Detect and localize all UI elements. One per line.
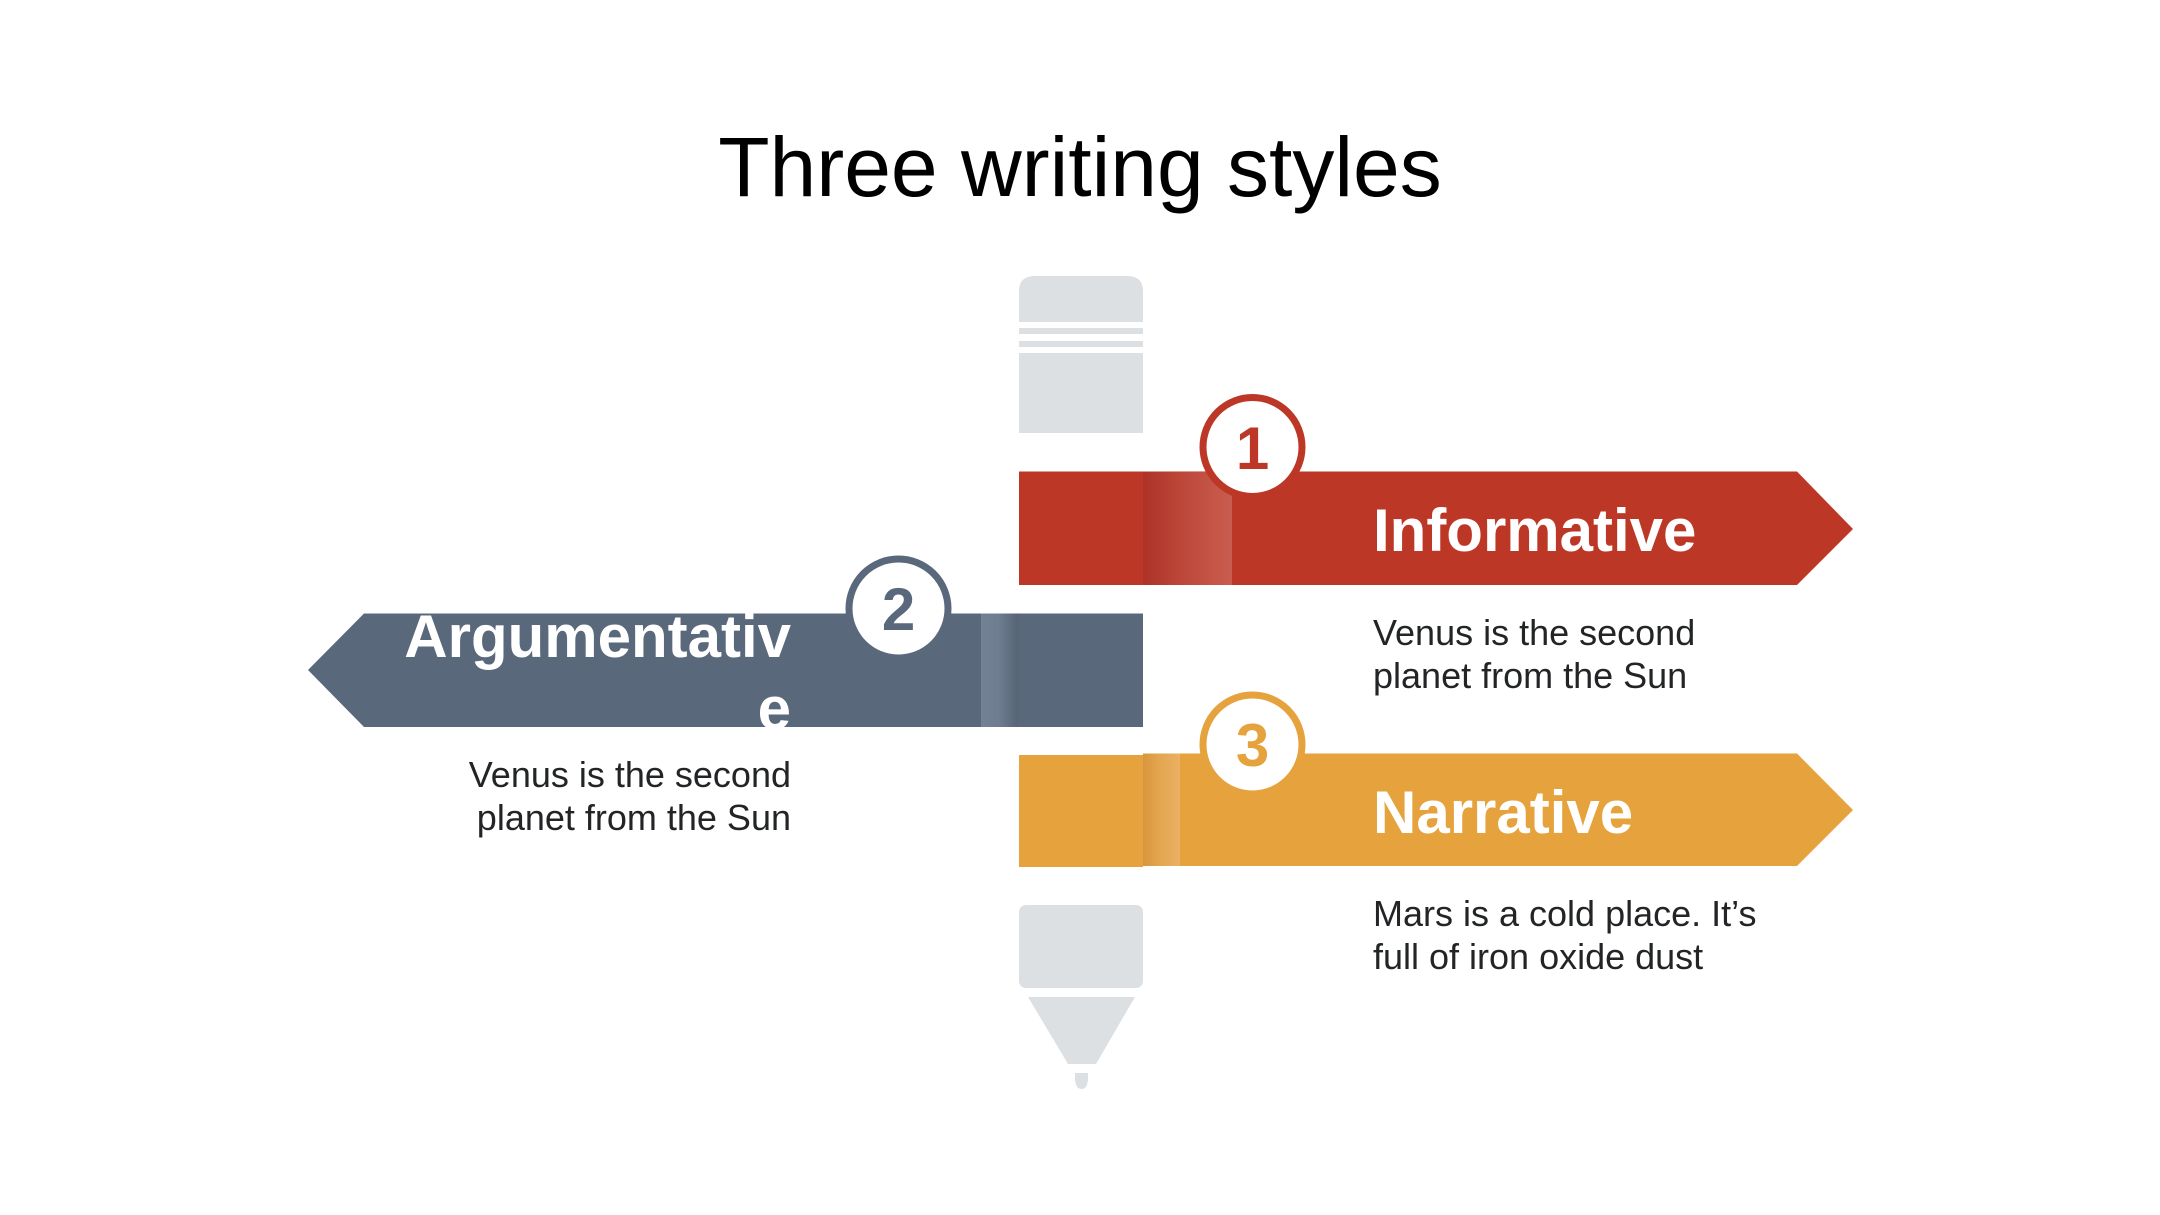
band fold highlight [1143,472,1232,585]
band: orange arrow [1019,754,1853,867]
band: red arrow [1019,472,1853,585]
heading: Argumentative: e [758,675,791,742]
text: narrative description: Mars is a cold place. It’s [1373,893,1756,934]
heading: Informative: Informative [1373,497,1696,564]
text: argumentative description: planet from the Sun [477,797,791,838]
icon: pencil eraser end [1019,276,1143,433]
text: informative description: Venus is the second [1373,612,1695,653]
number badge 3 [1203,695,1302,794]
number badge 1: 1 [1236,415,1269,482]
band fold highlight [981,614,1018,727]
text: informative description: planet from the Sun [1373,655,1687,696]
panel: argumentative band [308,559,1143,838]
number badge 2: 2 [882,576,915,643]
title: Three writing styles [718,120,1442,214]
band: gray arrow [308,614,1143,727]
band fold highlight [1143,754,1180,866]
heading: Argumentative: Argumentativ [404,603,792,670]
number badge 3: 3 [1236,712,1269,779]
text: narrative description: full of iron oxide dust [1373,936,1703,977]
panel: informative band [1019,398,1853,696]
icon: pencil tip [1019,905,1143,1089]
panel: narrative band [1019,695,1853,977]
number badge 2 [849,559,948,658]
number badge 1 [1203,398,1302,496]
text: argumentative description: Venus is the second [469,754,791,795]
heading: Narrative: Narrative [1373,779,1633,846]
